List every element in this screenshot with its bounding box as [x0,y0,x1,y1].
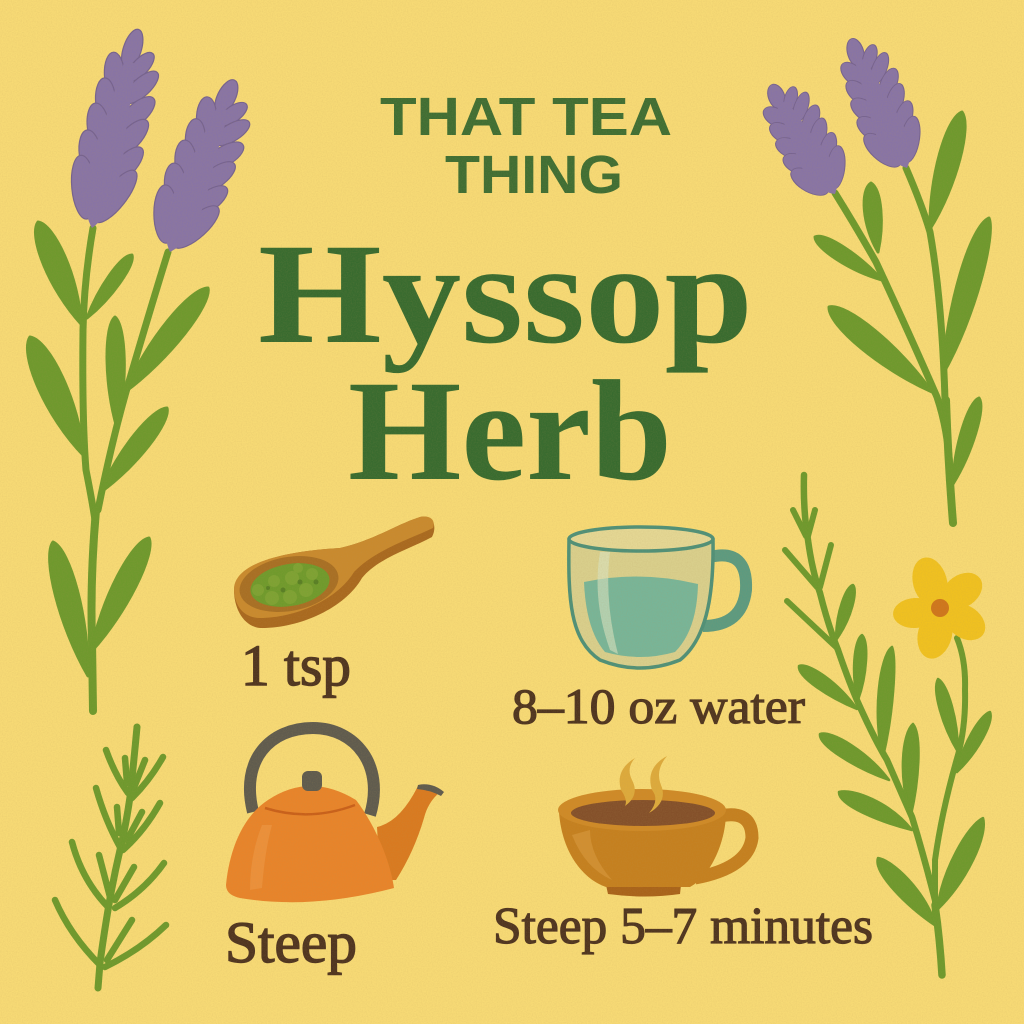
leaves [815,112,990,484]
lavender flower heads [740,24,940,212]
water [584,576,698,657]
title: Herb [348,352,672,511]
label: Steep: Steep [225,910,357,975]
lid line [265,805,355,814]
stem [98,727,137,988]
icon: glass of water [569,527,746,668]
handle [703,555,746,626]
label: Steep 5-7 minutes: Steep 5–7 minutes [493,898,873,955]
broad leaves [799,585,991,926]
handle [695,815,752,878]
label: 1 tsp: 1 tsp [241,633,351,698]
bottom-right sprig with yellow flower [785,475,992,975]
icon: kettle [226,728,444,902]
handle [250,728,374,815]
label: 8-10 oz water: 8–10 oz water [512,678,805,734]
steam [620,756,667,813]
icon: wooden spoon with herbs [234,517,434,628]
highlight [572,830,612,880]
stems [804,475,965,975]
stems [83,228,168,711]
rim [558,789,726,831]
highlight [598,552,618,654]
needle leaves [55,750,166,967]
foot [606,885,681,896]
tea surface [571,800,715,826]
right lavender plant [740,24,990,523]
bottom-left rosemary sprig [55,727,166,988]
bowl [559,812,726,887]
icon: yellow flower [892,553,992,662]
brand heading: THAT TEA [380,87,672,147]
body [226,786,394,902]
brand heading: THING [445,145,623,205]
rim [569,527,713,551]
title [258,215,753,511]
lavender flower heads [55,20,270,266]
glass body [569,540,713,668]
spout [377,786,440,880]
highlight [250,825,272,890]
leaves [27,222,208,676]
stems [835,168,953,523]
narrow leaves [785,510,836,647]
title: Hyssop [258,215,753,374]
left lavender plant [27,20,270,711]
icon: cup of tea with steam [558,756,752,896]
knob [302,771,322,791]
brand heading [380,87,672,205]
dried herbs [247,557,333,613]
